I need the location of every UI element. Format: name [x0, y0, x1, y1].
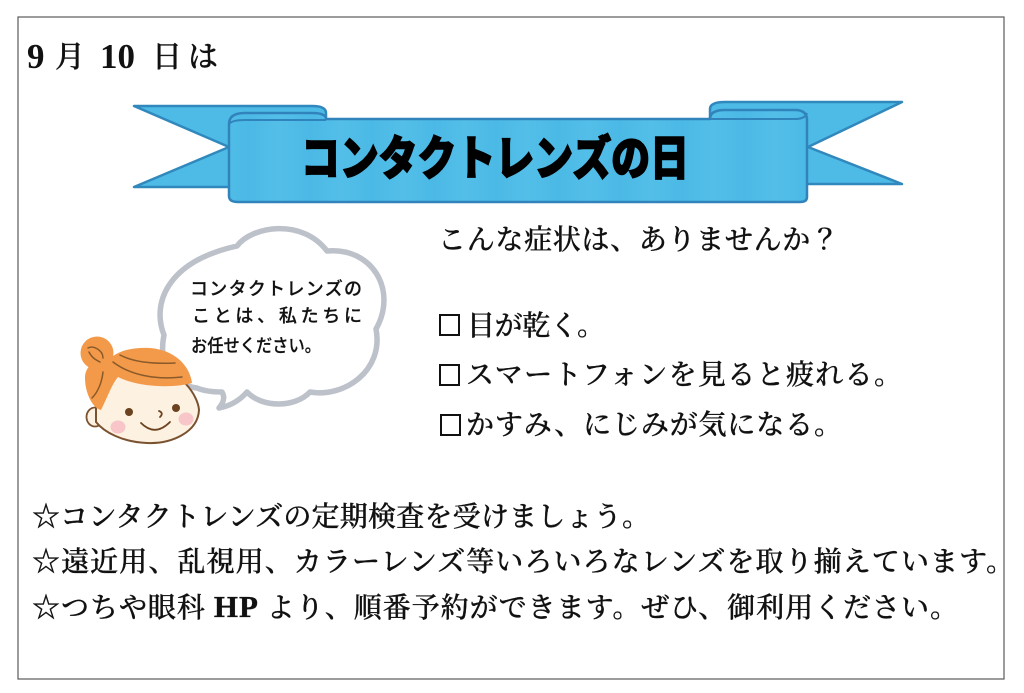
note: online reservation: ☆つちや眼科 HP より、順番予約ができます。ぜひ、御利用ください。 [32, 589, 958, 624]
symptoms question: こんな症状は、ありませんか？ [438, 224, 839, 256]
face [96, 368, 199, 443]
bubble message: コンタクトレンズの [190, 278, 362, 299]
symptom checklist [440, 310, 902, 441]
note: lens range: ☆遠近用、乱視用、カラーレンズ等いろいろなレンズを取り揃えています。 [32, 546, 1014, 578]
ribbon banner [134, 102, 902, 202]
information notes [32, 501, 1014, 624]
date heading: 9 [27, 37, 44, 76]
bubble outline [160, 229, 384, 408]
bubble message [190, 278, 362, 356]
bubble message: お任せください。 [191, 336, 321, 356]
speech bubble [160, 229, 384, 408]
ribbon main band [229, 110, 807, 202]
date heading [27, 37, 218, 76]
bubble message: ことは、私たちに [192, 306, 362, 326]
checklist item: blurred vision: かすみ、にじみが気になる。 [466, 409, 842, 441]
date heading: 日 [152, 41, 182, 74]
hair bun [80, 336, 114, 370]
date heading: 10 [100, 37, 135, 76]
note: regular checkups: ☆コンタクトレンズの定期検査を受けましょう。 [32, 501, 650, 533]
checklist item: smartphone fatigue: スマートフォンを見ると疲れる。 [466, 359, 902, 391]
ribbon fold lines [229, 113, 807, 124]
right ribbon tail [710, 102, 902, 184]
cheeks [110, 420, 126, 434]
checklist item: dry eyes: 目が乾く。 [467, 310, 605, 342]
left ribbon tail [134, 106, 326, 187]
icon: smiling girl [80, 336, 199, 443]
banner title: コンタクトレンズの日 [301, 132, 689, 185]
hair [85, 348, 192, 410]
date heading: は [188, 41, 218, 74]
hair strands [88, 347, 182, 398]
ear [86, 408, 104, 426]
nose and mouth [141, 411, 170, 430]
eyes [125, 408, 133, 416]
date heading: 月 [55, 41, 85, 74]
